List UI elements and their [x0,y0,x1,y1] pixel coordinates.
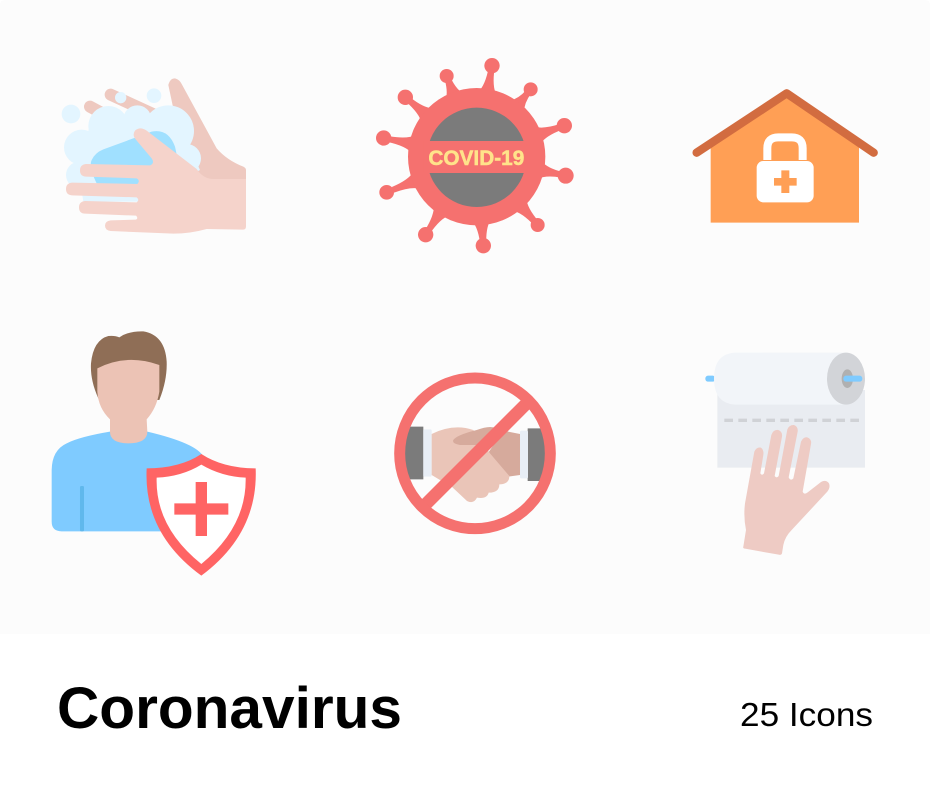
shield cross [174,482,228,536]
towel sheet [717,390,865,468]
label band [423,141,530,173]
virus spikes [376,58,574,253]
house body [711,95,859,223]
lock shackle [767,137,803,160]
left rod [705,376,715,382]
grey core [427,108,526,207]
perforation line [724,415,860,425]
hair [91,331,167,400]
icon: protected person with shield [52,331,256,576]
right rod [843,376,862,382]
medical cross [774,170,797,193]
right sleeve [528,428,547,481]
icon count: 25 Icons [740,696,873,733]
front hand [66,128,246,234]
shirt seam [80,486,84,531]
icon: paper towel and hand [705,353,865,555]
left hand [432,427,509,502]
right cuff [520,431,528,478]
left sleeve [403,427,423,479]
clasped thumb [453,427,513,445]
soap foam [62,88,201,202]
back hand [90,78,246,181]
lock body [757,161,814,202]
roof [697,93,874,153]
roll end [827,353,865,405]
prohibition ring [400,378,550,529]
left cuff [423,429,432,477]
hand [743,425,830,555]
shield inner [157,465,246,564]
shield [146,454,256,576]
right hand [487,431,520,477]
icon: house with medical lock [697,93,874,223]
face and neck [97,360,159,443]
icon: COVID-19 virus [376,58,574,253]
shirt [52,432,203,531]
icon: washing hands with soap [62,78,246,234]
roll core [842,369,853,388]
roll [714,353,847,405]
covid label: COVID-19 [428,145,524,170]
prohibition slash [425,403,527,505]
soap bar [91,131,180,200]
title: Coronavirus [57,676,402,741]
icon: no handshake [400,378,550,529]
